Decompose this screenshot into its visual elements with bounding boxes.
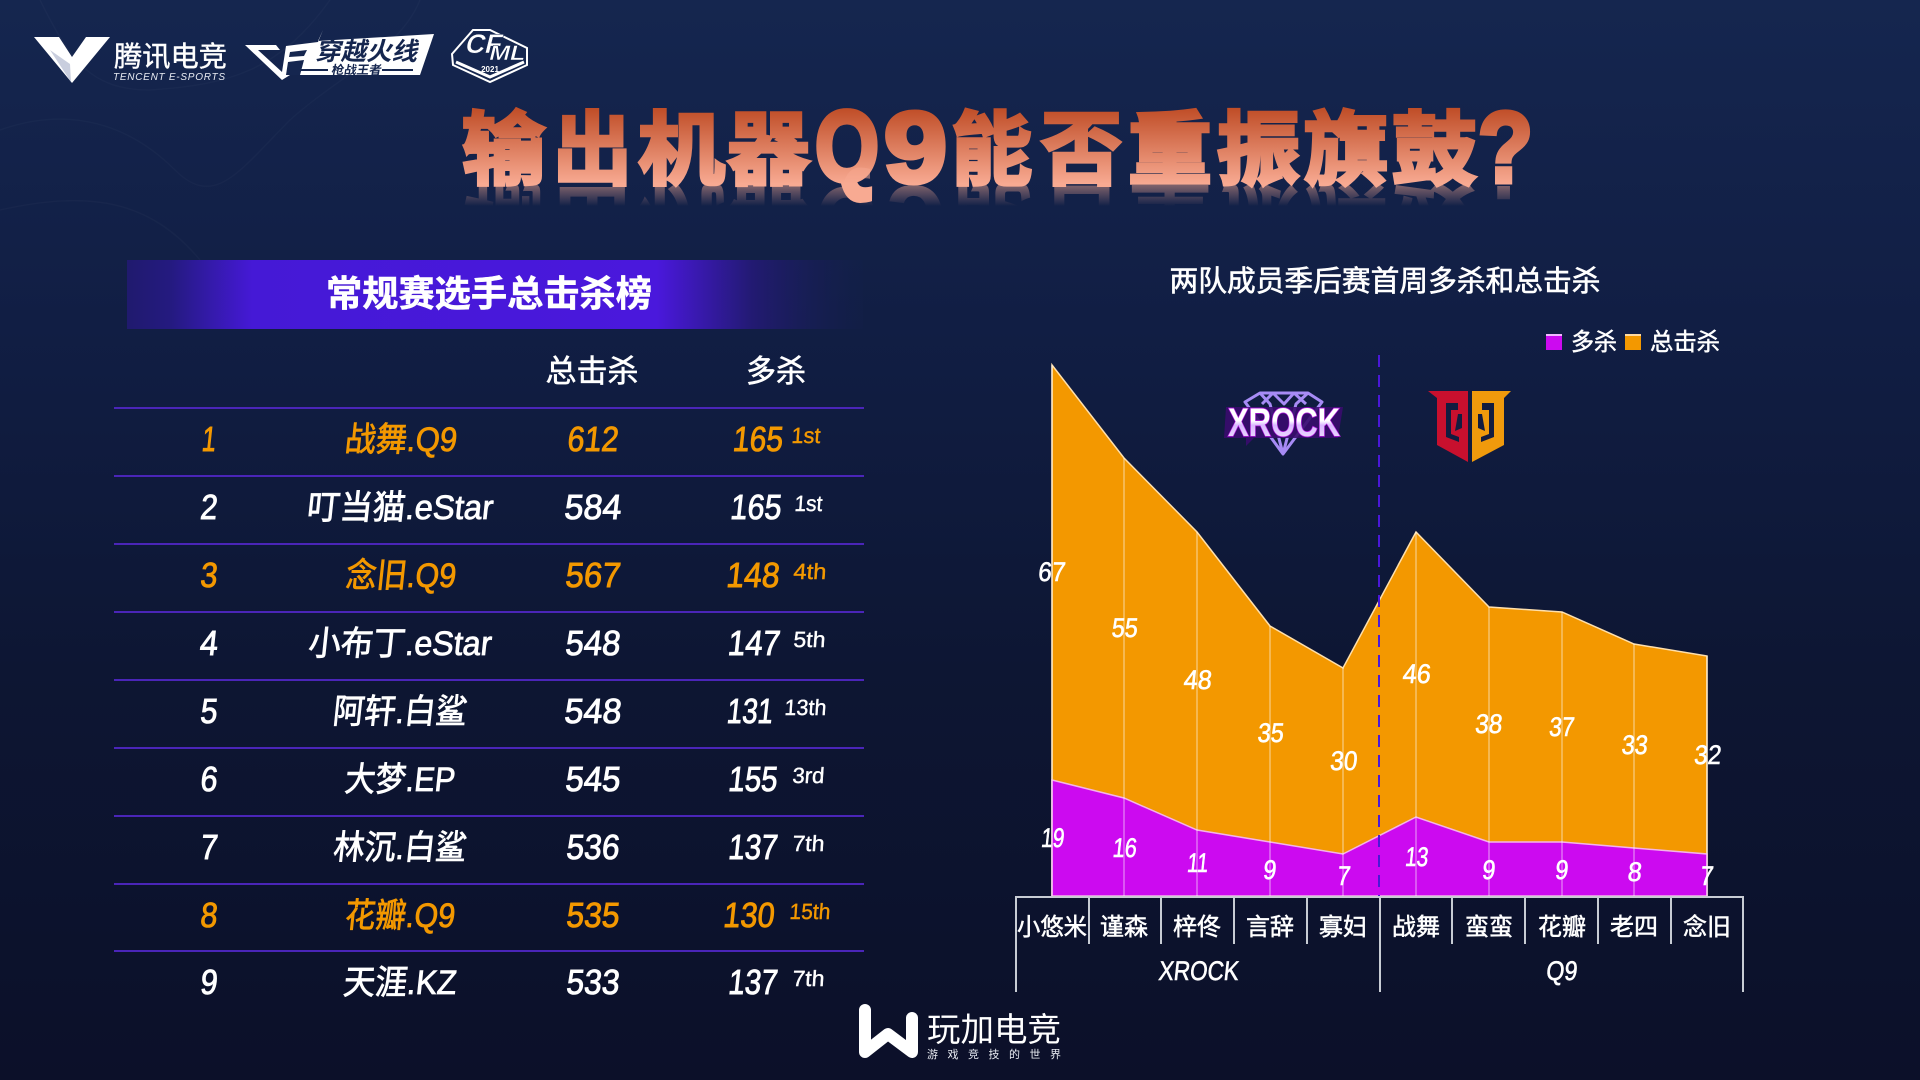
multi-kill data labels: 8: [1626, 856, 1644, 887]
multi-kill data labels: 9: [1554, 854, 1570, 885]
total kills data labels: 33: [1620, 729, 1650, 760]
row 8: 130: [722, 896, 777, 935]
title: 输: [462, 173, 545, 262]
row 1: 1st: [791, 423, 821, 448]
legend: 多杀: [1571, 329, 1617, 356]
row 9: [199, 963, 825, 1002]
row 4: 小布丁.eStar: [307, 625, 494, 663]
row 4: 5th: [793, 627, 826, 652]
row 6: 545: [564, 760, 623, 799]
title: 振: [1217, 106, 1300, 195]
title: 9: [884, 164, 947, 276]
row 4: [198, 624, 826, 663]
multi-kill data labels: [1040, 822, 1715, 891]
title: 出: [553, 106, 632, 195]
title: 否: [1041, 106, 1122, 195]
multi-kill data labels: 7: [1336, 860, 1352, 891]
row 4: 147: [726, 624, 782, 663]
logo: CFML 2021: CF: [463, 28, 506, 59]
row 9: 9: [199, 963, 220, 1002]
category axis: 老四: [1610, 914, 1658, 941]
row 7: 137: [727, 828, 780, 867]
title: 器: [727, 106, 810, 195]
logo: Tencent E-Sports: TENCENT E-SPORTS: [113, 72, 225, 83]
total kills data labels: 32: [1693, 739, 1723, 770]
title: 重: [1128, 173, 1212, 262]
category axis: Q9: [1545, 955, 1579, 986]
row 1: [200, 420, 821, 459]
category axis: 言辞: [1246, 914, 1294, 941]
logo: WanPlus eSports: 游戏竞技的世界: [927, 1047, 1061, 1061]
category axis: 谨森: [1100, 914, 1148, 941]
row 8: 15th: [789, 899, 831, 924]
title: 机: [638, 106, 725, 195]
category axis: 蛮蛮: [1465, 914, 1513, 941]
area: multi-kills: [1052, 780, 1707, 896]
table column headers: 总击杀: [546, 354, 638, 389]
icon: XROCK team logo: XROCK: [1228, 401, 1340, 445]
row 8: 535: [565, 896, 622, 935]
row 8: 花瓣.Q9: [343, 897, 457, 935]
icon: XROCK team logo: [1224, 393, 1343, 454]
logo: WanPlus eSports: 玩加电竞: [927, 1011, 1061, 1048]
logo: CrossFire: [245, 30, 434, 80]
multi-kill data labels: 7: [1699, 860, 1715, 891]
row 1: 战舞.Q9: [343, 421, 459, 459]
title: 9: [884, 92, 947, 204]
title: ?: [1478, 92, 1533, 204]
row 3: 4th: [793, 559, 827, 584]
row 3: 念旧.Q9: [344, 557, 458, 595]
total kills data labels: 35: [1256, 717, 1286, 748]
title: 否: [1041, 173, 1122, 262]
title: 出: [553, 173, 632, 262]
row 2: 1st: [794, 491, 823, 516]
row 1: 1: [200, 420, 218, 459]
row 7: 7th: [792, 831, 825, 856]
table column headers: 多杀: [746, 354, 806, 389]
logo: CFML 2021: [452, 28, 529, 82]
total kills data labels: 38: [1474, 708, 1504, 739]
row 2: 叮当猫.eStar: [305, 489, 495, 527]
title: 旗: [1304, 173, 1388, 262]
panel: regular season kill ranking: [114, 260, 864, 1002]
row 2: 2: [199, 488, 220, 527]
legend: [1546, 329, 1720, 356]
category axis: 念旧: [1683, 914, 1731, 941]
total kills data labels: 48: [1182, 664, 1214, 695]
title: 振: [1217, 173, 1300, 262]
row 2: [199, 488, 823, 527]
row 4: 4: [198, 624, 220, 663]
title: 旗: [1304, 106, 1388, 195]
area: total kills: [1052, 365, 1707, 896]
title: 机: [638, 173, 725, 262]
category axis: 战舞: [1392, 914, 1440, 941]
row 1: 612: [566, 420, 621, 459]
logo: CrossFire: 枪战王者: [330, 62, 383, 77]
row 9: 533: [565, 963, 622, 1002]
row 5: 阿轩.白鲨: [331, 693, 469, 731]
area chart: multi-kills and total kills: [1015, 355, 1744, 992]
total kills data labels: 30: [1329, 745, 1359, 776]
logo: CFML 2021: ML: [487, 41, 529, 65]
title: Q: [815, 165, 879, 277]
multi-kill data labels: 9: [1262, 854, 1278, 885]
row 7: [199, 828, 825, 867]
row 3: 148: [725, 556, 782, 595]
title: 器: [727, 173, 810, 262]
title: 鼓: [1392, 173, 1477, 262]
category axis: XROCK: [1157, 955, 1241, 986]
row 2: 165: [729, 488, 784, 527]
icon: Q9 team logo: [1428, 391, 1511, 462]
row 7: 536: [565, 828, 622, 867]
title: 能: [951, 173, 1032, 262]
total kills data labels: [1037, 556, 1723, 776]
title: 输: [462, 106, 545, 195]
row 9: 137: [727, 963, 780, 1002]
title: [462, 91, 1533, 277]
row 8: [199, 896, 831, 935]
logo: Tencent E-Sports: 腾讯电竞: [114, 41, 227, 72]
title: Q: [815, 91, 879, 203]
row 6: 3rd: [792, 763, 825, 788]
chart heading: 两队成员季后赛首周多杀和总击杀: [1170, 265, 1600, 298]
panel heading: 常规赛选手总击杀榜: [326, 273, 652, 314]
table column headers: [546, 354, 806, 389]
title: 能: [951, 106, 1032, 195]
title: 鼓: [1392, 106, 1477, 195]
total kills data labels: 67: [1037, 556, 1067, 587]
category axis: 花瓣: [1538, 914, 1586, 941]
multi-kill data labels: 19: [1040, 822, 1066, 853]
row 1: 165: [731, 420, 785, 459]
row 6: 155: [727, 760, 780, 799]
logo: WanPlus eSports: [865, 1010, 1061, 1061]
row 3: 3: [199, 556, 220, 595]
row 8: 8: [199, 896, 220, 935]
multi-kill data labels: 16: [1111, 832, 1139, 863]
category axis: 小悠米: [1017, 914, 1087, 941]
row 5: 131: [725, 692, 775, 731]
panel heading: [127, 260, 863, 329]
legend: 总击杀: [1650, 329, 1720, 356]
row 2: 584: [563, 488, 624, 527]
category axis: 梓佟: [1173, 914, 1221, 941]
category axis: [1015, 897, 1744, 992]
total kills data labels: 55: [1110, 612, 1140, 643]
logo: CFML 2021: 2021: [481, 65, 499, 74]
total kills data labels: 46: [1401, 658, 1433, 689]
total kills data labels: 37: [1548, 711, 1576, 742]
multi-kill data labels: 11: [1186, 847, 1210, 878]
multi-kill data labels: 13: [1404, 841, 1430, 872]
title: ?: [1478, 164, 1533, 276]
logo: Tencent E-Sports: [34, 37, 227, 83]
row 3: [199, 556, 827, 595]
row 4: 548: [564, 624, 623, 663]
row 9: 7th: [792, 966, 825, 991]
row 5: [199, 692, 827, 731]
multi-kill data labels: 9: [1481, 854, 1497, 885]
row 6: 6: [199, 760, 220, 799]
row 5: 13th: [784, 695, 827, 720]
row 6: [199, 760, 825, 799]
row 3: 567: [564, 556, 623, 595]
logo: CrossFire: 穿越火线: [314, 38, 422, 66]
row 6: 大梦.EP: [343, 761, 457, 799]
category axis: 寡妇: [1319, 914, 1367, 941]
row 9: 天涯.KZ: [342, 964, 459, 1002]
row 5: 5: [199, 692, 220, 731]
title: 重: [1128, 106, 1212, 195]
row 7: 林沉.白鲨: [332, 829, 469, 867]
row 7: 7: [199, 828, 220, 867]
row 5: 548: [563, 692, 624, 731]
